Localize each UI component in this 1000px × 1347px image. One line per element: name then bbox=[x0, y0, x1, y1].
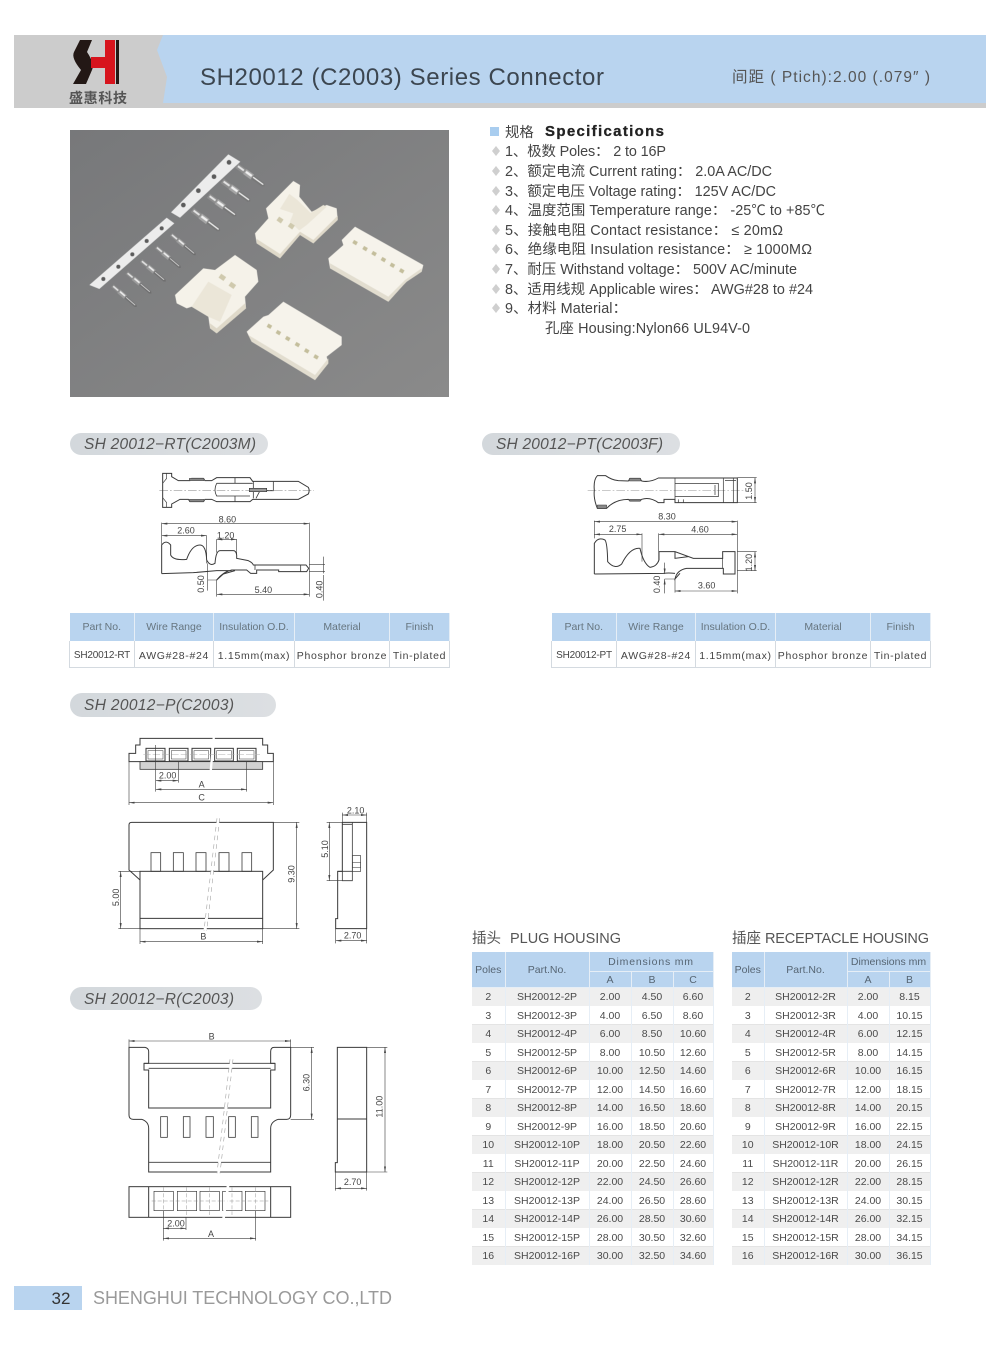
table: receptacle housing dimensions: 36.15 bbox=[896, 1250, 923, 1262]
table: plug housing dimensions: 16.00 bbox=[597, 1120, 623, 1132]
table: receptacle housing dimensions: 11 bbox=[742, 1158, 753, 1170]
table: receptacle housing dimensions: SH20012-2R bbox=[775, 991, 836, 1003]
specification lines: 2、额定电流 Current rating： 2.0A AC/DC bbox=[505, 163, 772, 180]
table: plug housing dimensions: 10.00 bbox=[597, 1065, 623, 1077]
table: plug housing dimensions: 7 bbox=[485, 1084, 491, 1096]
table: plug housing dimensions: 22.00 bbox=[597, 1176, 623, 1188]
table: plug housing dimensions: SH20012-8P bbox=[517, 1102, 577, 1114]
table: receptacle housing dimensions: 26.15 bbox=[896, 1158, 923, 1170]
receptacle dimensions: B bbox=[209, 1031, 215, 1041]
plug dimensions: 2.10 bbox=[347, 806, 364, 816]
table: receptacle housing dimensions: SH20012-12R bbox=[772, 1176, 839, 1188]
specification lines: 7、耐压 Withstand voltage： 500V AC/minute bbox=[505, 261, 797, 278]
table: plug housing dimensions: 4.50 bbox=[642, 991, 662, 1003]
table: plug housing dimensions: 12.50 bbox=[639, 1065, 665, 1077]
terminal strip upper bbox=[171, 154, 266, 233]
table: RT terminal: Material bbox=[323, 621, 361, 633]
table: receptacle housing dimensions: 22.00 bbox=[855, 1176, 881, 1188]
table: receptacle housing dimensions: SH20012-6R bbox=[775, 1065, 836, 1077]
table: plug housing dimensions: 16.60 bbox=[680, 1084, 706, 1096]
table: receptacle housing dimensions: 20.00 bbox=[855, 1158, 881, 1170]
table: plug housing dimensions: 9 bbox=[485, 1120, 491, 1132]
table: plug housing dimensions: Poles bbox=[475, 964, 501, 976]
table: plug housing dimensions: 8.00 bbox=[600, 1046, 620, 1058]
table: plug housing dimensions: 24.60 bbox=[680, 1158, 706, 1170]
table: plug housing dimensions: 10.60 bbox=[680, 1028, 706, 1040]
table: plug housing dimensions: 6 bbox=[485, 1065, 491, 1077]
specification lines: 4、温度范围 Temperature range： -25℃ to +85℃ bbox=[505, 202, 825, 219]
table: plug housing dimensions: 34.60 bbox=[680, 1250, 706, 1262]
table: RT terminal bbox=[69, 613, 450, 668]
table: receptacle housing dimensions: SH20012-15R bbox=[772, 1232, 839, 1244]
table: plug housing dimensions: 14 bbox=[482, 1213, 494, 1225]
table: plug housing dimensions: 14.60 bbox=[680, 1065, 706, 1077]
specifications heading: Specifications bbox=[545, 123, 664, 140]
table: plug housing dimensions: SH20012-9P bbox=[517, 1120, 577, 1132]
table: plug housing dimensions: 8.50 bbox=[642, 1028, 662, 1040]
table: receptacle housing dimensions: SH20012-16R bbox=[772, 1250, 839, 1262]
table: receptacle housing dimensions: 16.15 bbox=[896, 1065, 923, 1077]
drawing: plug housing P bbox=[111, 735, 367, 944]
table: PT terminal: Part No. bbox=[564, 621, 603, 633]
table: receptacle housing dimensions: 32.15 bbox=[896, 1213, 923, 1225]
table: plug housing dimensions: 18.60 bbox=[680, 1102, 706, 1114]
table: receptacle housing dimensions: 16 bbox=[742, 1250, 754, 1262]
table: plug housing dimensions: 6.60 bbox=[683, 991, 703, 1003]
table: plug housing dimensions: B bbox=[648, 974, 656, 986]
table: RT terminal: Phosphor bronze bbox=[297, 650, 387, 662]
table: RT terminal: 1.15mm(max) bbox=[218, 650, 290, 662]
table: plug housing dimensions: 30.50 bbox=[639, 1232, 665, 1244]
table: receptacle housing dimensions: 15 bbox=[742, 1232, 754, 1244]
table: plug housing dimensions: Part.No. bbox=[528, 964, 566, 976]
table: receptacle housing dimensions: 28.15 bbox=[896, 1176, 923, 1188]
table: plug housing dimensions: 8.60 bbox=[683, 1010, 703, 1022]
terminal dimensions bbox=[162, 514, 325, 601]
table: receptacle housing dimensions: Dimensions mm bbox=[851, 956, 926, 968]
table: PT terminal: Insulation O.D. bbox=[701, 621, 770, 633]
specification lines: 1、极数 Poles： 2 to 16P bbox=[505, 143, 666, 160]
table: PT terminal: Finish bbox=[886, 621, 914, 633]
table: plug housing dimensions: SH20012-10P bbox=[514, 1139, 580, 1151]
plug top view bbox=[129, 735, 273, 772]
receptacle dimensions: 2.70 bbox=[344, 1177, 361, 1187]
terminal dimensions: 8.30 bbox=[658, 511, 676, 521]
page number bbox=[14, 1286, 82, 1310]
specification lines: 3、额定电压 Voltage rating： 125V AC/DC bbox=[505, 183, 776, 200]
table: receptacle housing dimensions: 24.00 bbox=[855, 1194, 881, 1206]
table: receptacle housing dimensions: SH20012-4R bbox=[775, 1028, 836, 1040]
terminal dimensions: 1.20 bbox=[217, 530, 234, 540]
table: plug housing dimensions: 16.50 bbox=[639, 1102, 665, 1114]
plug dimensions: 5.10 bbox=[320, 840, 330, 858]
housing upper bbox=[255, 181, 338, 258]
terminal dimensions: 8.60 bbox=[219, 514, 236, 524]
table: PT terminal: SH20012-PT bbox=[556, 650, 612, 661]
table: plug housing dimensions: 28.60 bbox=[680, 1194, 706, 1206]
table: plug housing dimensions: SH20012-3P bbox=[517, 1010, 577, 1022]
table: receptacle housing dimensions: SH20012-10R bbox=[772, 1139, 839, 1151]
specification lines: 6、绝缘电阻 Insulation resistance： ≥ 1000MΩ bbox=[505, 241, 812, 258]
table: plug housing dimensions: 28.50 bbox=[639, 1213, 665, 1225]
table: plug housing dimensions: SH20012-6P bbox=[517, 1065, 577, 1077]
table: receptacle housing dimensions: 28.00 bbox=[855, 1232, 881, 1244]
terminal top view bbox=[159, 473, 314, 507]
housing bottom bbox=[247, 302, 342, 380]
table: receptacle housing dimensions: B bbox=[906, 974, 913, 986]
table: receptacle housing dimensions: SH20012-3R bbox=[775, 1010, 836, 1022]
specification lines bbox=[505, 143, 825, 337]
table: plug housing dimensions: 30.00 bbox=[597, 1250, 623, 1262]
table: RT terminal: Insulation O.D. bbox=[219, 621, 289, 633]
table: plug housing dimensions: 14.00 bbox=[597, 1102, 623, 1114]
table: RT terminal: SH20012-RT bbox=[74, 650, 130, 661]
table: plug housing dimensions: 12.60 bbox=[680, 1046, 706, 1058]
table: receptacle housing dimensions: 4.00 bbox=[858, 1010, 878, 1022]
table: plug housing dimensions: SH20012-7P bbox=[517, 1084, 577, 1096]
receptacle dimensions: 2.00 bbox=[167, 1219, 185, 1229]
table: receptacle housing dimensions: SH20012-14R bbox=[772, 1213, 839, 1225]
table: RT terminal: AWG#28-#24 bbox=[139, 650, 209, 662]
table: receptacle housing dimensions: A bbox=[864, 974, 872, 986]
table: receptacle housing dimensions: 22.15 bbox=[896, 1120, 923, 1132]
plug front view bbox=[129, 818, 273, 931]
table: plug housing dimensions: 8 bbox=[485, 1102, 491, 1114]
header band bbox=[14, 35, 986, 108]
table: PT terminal: Material bbox=[804, 621, 842, 633]
table: RT terminal: Tin-plated bbox=[393, 650, 446, 662]
table: plug housing dimensions: SH20012-2P bbox=[517, 991, 577, 1003]
footer bbox=[14, 1286, 392, 1310]
heading: plug housing: 插头 bbox=[472, 930, 501, 947]
table: plug housing dimensions: 15 bbox=[482, 1232, 494, 1244]
table: receptacle housing dimensions: 20.15 bbox=[896, 1102, 923, 1114]
table: receptacle housing dimensions: SH20012-11R bbox=[773, 1158, 838, 1170]
drawing: receptacle housing R bbox=[129, 1031, 387, 1241]
table: plug housing dimensions: 13 bbox=[482, 1194, 494, 1206]
table: receptacle housing dimensions: 6 bbox=[745, 1065, 751, 1077]
table: plug housing dimensions: 24.50 bbox=[639, 1176, 665, 1188]
table: receptacle housing dimensions: 8.00 bbox=[858, 1046, 878, 1058]
table: receptacle housing dimensions: 14.00 bbox=[855, 1102, 881, 1114]
table: plug housing dimensions: 20.50 bbox=[639, 1139, 665, 1151]
housing lower left bbox=[175, 255, 258, 333]
table: plug housing dimensions: SH20012-16P bbox=[514, 1250, 580, 1262]
table: plug housing dimensions: SH20012-4P bbox=[517, 1028, 577, 1040]
table: receptacle housing dimensions: 5 bbox=[745, 1046, 751, 1058]
heading: receptacle housing: RECEPTACLE HOUSING bbox=[765, 931, 929, 947]
table: plug housing dimensions: SH20012-15P bbox=[514, 1232, 580, 1244]
receptacle side view bbox=[335, 1047, 367, 1172]
specifications heading bbox=[490, 123, 664, 141]
table: receptacle housing dimensions: SH20012-9R bbox=[775, 1120, 836, 1132]
page number: 32 bbox=[52, 1289, 70, 1308]
terminal dimensions: 5.40 bbox=[255, 585, 272, 595]
table: PT terminal: Phosphor bronze bbox=[778, 650, 868, 662]
terminal top view bbox=[588, 476, 745, 508]
table: PT terminal: AWG#28-#24 bbox=[621, 650, 691, 662]
table: plug housing dimensions: 11 bbox=[483, 1158, 494, 1170]
section pill: PT bbox=[482, 433, 680, 455]
table: plug housing dimensions: C bbox=[689, 974, 697, 986]
table: RT terminal: Wire Range bbox=[146, 621, 202, 633]
plug side view bbox=[336, 822, 367, 929]
table: plug housing dimensions: A bbox=[606, 974, 614, 986]
table: PT terminal: 1.15mm(max) bbox=[699, 650, 772, 662]
terminal dimensions: 0.40 bbox=[652, 576, 662, 593]
table: plug housing dimensions: SH20012-11P bbox=[514, 1158, 580, 1170]
table: receptacle housing dimensions: 12.00 bbox=[855, 1084, 881, 1096]
section pill: PT: SH 20012−PT(C2003F) bbox=[496, 436, 663, 453]
table: plug housing dimensions: 26.60 bbox=[680, 1176, 706, 1188]
table: plug housing dimensions: 30.60 bbox=[680, 1213, 706, 1225]
terminal side view bbox=[594, 539, 735, 579]
table: plug housing dimensions: 28.00 bbox=[597, 1232, 623, 1244]
table: receptacle housing dimensions: 2.00 bbox=[858, 991, 878, 1003]
table: receptacle housing dimensions: 8.15 bbox=[899, 991, 920, 1003]
table: receptacle housing dimensions: 13 bbox=[742, 1194, 754, 1206]
table: receptacle housing dimensions: SH20012-7R bbox=[775, 1084, 836, 1096]
table: plug housing dimensions: 32.60 bbox=[680, 1232, 706, 1244]
terminal dimensions: 2.75 bbox=[609, 524, 626, 534]
table: receptacle housing dimensions: 10.00 bbox=[855, 1065, 881, 1077]
receptacle bottom view bbox=[129, 1183, 291, 1220]
table: receptacle housing dimensions: Part.No. bbox=[786, 964, 825, 976]
drawing: male terminal RT bbox=[159, 473, 325, 601]
terminal strip lower bbox=[89, 218, 197, 309]
specification lines: 孔座 Housing:Nylon66 UL94V-0 bbox=[545, 320, 750, 337]
table: plug housing dimensions: 24.00 bbox=[597, 1194, 623, 1206]
table: plug housing dimensions: 18.50 bbox=[639, 1120, 665, 1132]
table: receptacle housing dimensions: SH20012-5R bbox=[775, 1046, 836, 1058]
specifications heading: 规格 bbox=[505, 124, 534, 141]
product photo bbox=[70, 130, 449, 397]
terminal dimensions bbox=[594, 478, 757, 593]
section pill: RT: SH 20012−RT(C2003M) bbox=[84, 436, 256, 453]
heading: receptacle housing: 插座 bbox=[732, 930, 761, 947]
specification lines: 8、适用线规 Applicable wires： AWG#28 to #24 bbox=[505, 281, 813, 298]
table: plug housing dimensions: 32.50 bbox=[639, 1250, 665, 1262]
table: receptacle housing dimensions: 10 bbox=[742, 1139, 754, 1151]
specification lines: 5、接触电阻 Contact resistance： ≤ 20mΩ bbox=[505, 222, 783, 239]
terminal dimensions: 4.60 bbox=[691, 525, 709, 535]
table: plug housing dimensions: 18.00 bbox=[597, 1139, 623, 1151]
housing right bbox=[328, 227, 423, 302]
table: receptacle housing dimensions: 16.00 bbox=[855, 1120, 881, 1132]
section pill: R bbox=[70, 987, 262, 1010]
title: SH20012 (C2003) Series Connector bbox=[200, 64, 604, 91]
logo: 盛惠科技 bbox=[69, 90, 127, 106]
plug dimensions: C bbox=[198, 792, 205, 802]
table: receptacle housing dimensions: 26.00 bbox=[855, 1213, 881, 1225]
plug dimensions: 2.00 bbox=[159, 771, 176, 781]
table: receptacle housing dimensions: 4 bbox=[745, 1028, 751, 1040]
table: plug housing dimensions: 20.00 bbox=[597, 1158, 623, 1170]
terminal dimensions: 2.60 bbox=[177, 526, 195, 536]
section pill: R: SH 20012−R(C2003) bbox=[84, 991, 234, 1008]
plug dimensions: B bbox=[200, 932, 206, 942]
table: plug housing dimensions bbox=[472, 952, 714, 1265]
terminal dimensions: 0.40 bbox=[315, 581, 325, 598]
table: plug housing dimensions: 2 bbox=[485, 991, 491, 1003]
table: receptacle housing dimensions: 14 bbox=[742, 1213, 754, 1225]
plug dimensions: 2.70 bbox=[344, 931, 361, 941]
table: plug housing dimensions: 6.50 bbox=[642, 1010, 662, 1022]
receptacle front view bbox=[129, 1047, 291, 1173]
terminal dimensions: 1.20 bbox=[744, 554, 754, 571]
table: plug housing dimensions: SH20012-13P bbox=[514, 1194, 580, 1206]
table: receptacle housing dimensions: 9 bbox=[745, 1120, 751, 1132]
table: plug housing dimensions: 4 bbox=[485, 1028, 491, 1040]
table: plug housing dimensions: 2.00 bbox=[600, 991, 620, 1003]
table: plug housing dimensions: 10.50 bbox=[639, 1046, 665, 1058]
table: receptacle housing dimensions: SH20012-13R bbox=[772, 1194, 839, 1206]
table: RT terminal: Part No. bbox=[82, 621, 121, 633]
section pill: P bbox=[70, 693, 276, 717]
table: receptacle housing dimensions bbox=[732, 952, 931, 1265]
terminal side view bbox=[162, 542, 309, 580]
receptacle dimensions: 11.00 bbox=[375, 1096, 385, 1118]
receptacle dimensions: 6.30 bbox=[301, 1074, 311, 1091]
terminal dimensions: 3.60 bbox=[698, 580, 715, 590]
terminal dimensions: 0.50 bbox=[196, 575, 206, 593]
table: PT terminal: Wire Range bbox=[628, 621, 684, 633]
table: plug housing dimensions: 14.50 bbox=[639, 1084, 665, 1096]
table: receptacle housing dimensions: 12 bbox=[742, 1176, 754, 1188]
table: receptacle housing dimensions: 30.00 bbox=[855, 1250, 881, 1262]
plug dimensions: 9.30 bbox=[287, 865, 297, 883]
table: receptacle housing dimensions: 7 bbox=[745, 1084, 751, 1096]
table: plug housing dimensions: 16 bbox=[482, 1250, 494, 1262]
specifications bbox=[490, 123, 825, 337]
table: receptacle housing dimensions: 3 bbox=[745, 1010, 751, 1022]
table: plug housing dimensions: 20.60 bbox=[680, 1120, 706, 1132]
table: plug housing dimensions: 4.00 bbox=[600, 1010, 620, 1022]
table: receptacle housing dimensions: SH20012-8R bbox=[775, 1102, 836, 1114]
table: RT terminal: Finish bbox=[405, 621, 434, 633]
table: receptacle housing dimensions: 8 bbox=[745, 1102, 751, 1114]
plug dimensions: A bbox=[199, 780, 205, 790]
pitch note: 间距 ( Ptich):2.00 (.079″ ) bbox=[732, 68, 930, 86]
table: receptacle housing dimensions: 14.15 bbox=[896, 1046, 923, 1058]
table: receptacle housing dimensions: 30.15 bbox=[896, 1194, 923, 1206]
heading: plug housing: PLUG HOUSING bbox=[510, 931, 621, 947]
table: receptacle housing dimensions: 10.15 bbox=[896, 1010, 923, 1022]
table: receptacle housing dimensions: 24.15 bbox=[896, 1139, 923, 1151]
table: receptacle housing dimensions: 2 bbox=[745, 991, 751, 1003]
table: plug housing dimensions: 26.50 bbox=[639, 1194, 665, 1206]
plug dimensions bbox=[111, 745, 367, 944]
section pill: RT bbox=[70, 433, 268, 455]
terminal dimensions: 1.50 bbox=[744, 482, 754, 500]
table: plug housing dimensions: 22.50 bbox=[639, 1158, 665, 1170]
receptacle dimensions bbox=[129, 1031, 387, 1241]
specification bullets bbox=[492, 146, 500, 313]
drawing: female terminal PT bbox=[588, 476, 757, 593]
table: receptacle housing dimensions: Poles bbox=[735, 964, 761, 976]
logo bbox=[69, 40, 127, 106]
table: receptacle housing dimensions: 34.15 bbox=[896, 1232, 923, 1244]
table: plug housing dimensions: 22.60 bbox=[680, 1139, 706, 1151]
section pill: P: SH 20012−P(C2003) bbox=[84, 697, 234, 714]
table: plug housing dimensions: SH20012-14P bbox=[514, 1213, 580, 1225]
specification lines: 9、材料 Material： bbox=[505, 300, 627, 317]
table: PT terminal bbox=[551, 613, 931, 668]
table: receptacle housing dimensions: 12.15 bbox=[896, 1028, 923, 1040]
receptacle dimensions: A bbox=[208, 1229, 214, 1239]
company name: SHENGHUI TECHNOLOGY CO.,LTD bbox=[93, 1288, 392, 1308]
table: plug housing dimensions: 3 bbox=[485, 1010, 491, 1022]
table: plug housing dimensions: SH20012-12P bbox=[514, 1176, 580, 1188]
table: plug housing dimensions: 12 bbox=[482, 1176, 494, 1188]
table: receptacle housing dimensions: 18.00 bbox=[855, 1139, 881, 1151]
table: plug housing dimensions: Dimensions mm bbox=[608, 956, 694, 968]
table: plug housing dimensions: SH20012-5P bbox=[517, 1046, 577, 1058]
table: plug housing dimensions: 6.00 bbox=[600, 1028, 620, 1040]
table: plug housing dimensions: 10 bbox=[482, 1139, 494, 1151]
plug dimensions: 5.00 bbox=[111, 889, 121, 906]
table: plug housing dimensions: 26.00 bbox=[597, 1213, 623, 1225]
table: plug housing dimensions: 12.00 bbox=[597, 1084, 623, 1096]
table: receptacle housing dimensions: 6.00 bbox=[858, 1028, 878, 1040]
table: plug housing dimensions: 5 bbox=[485, 1046, 491, 1058]
table: receptacle housing dimensions: 18.15 bbox=[896, 1084, 923, 1096]
table: PT terminal: Tin-plated bbox=[874, 650, 927, 662]
